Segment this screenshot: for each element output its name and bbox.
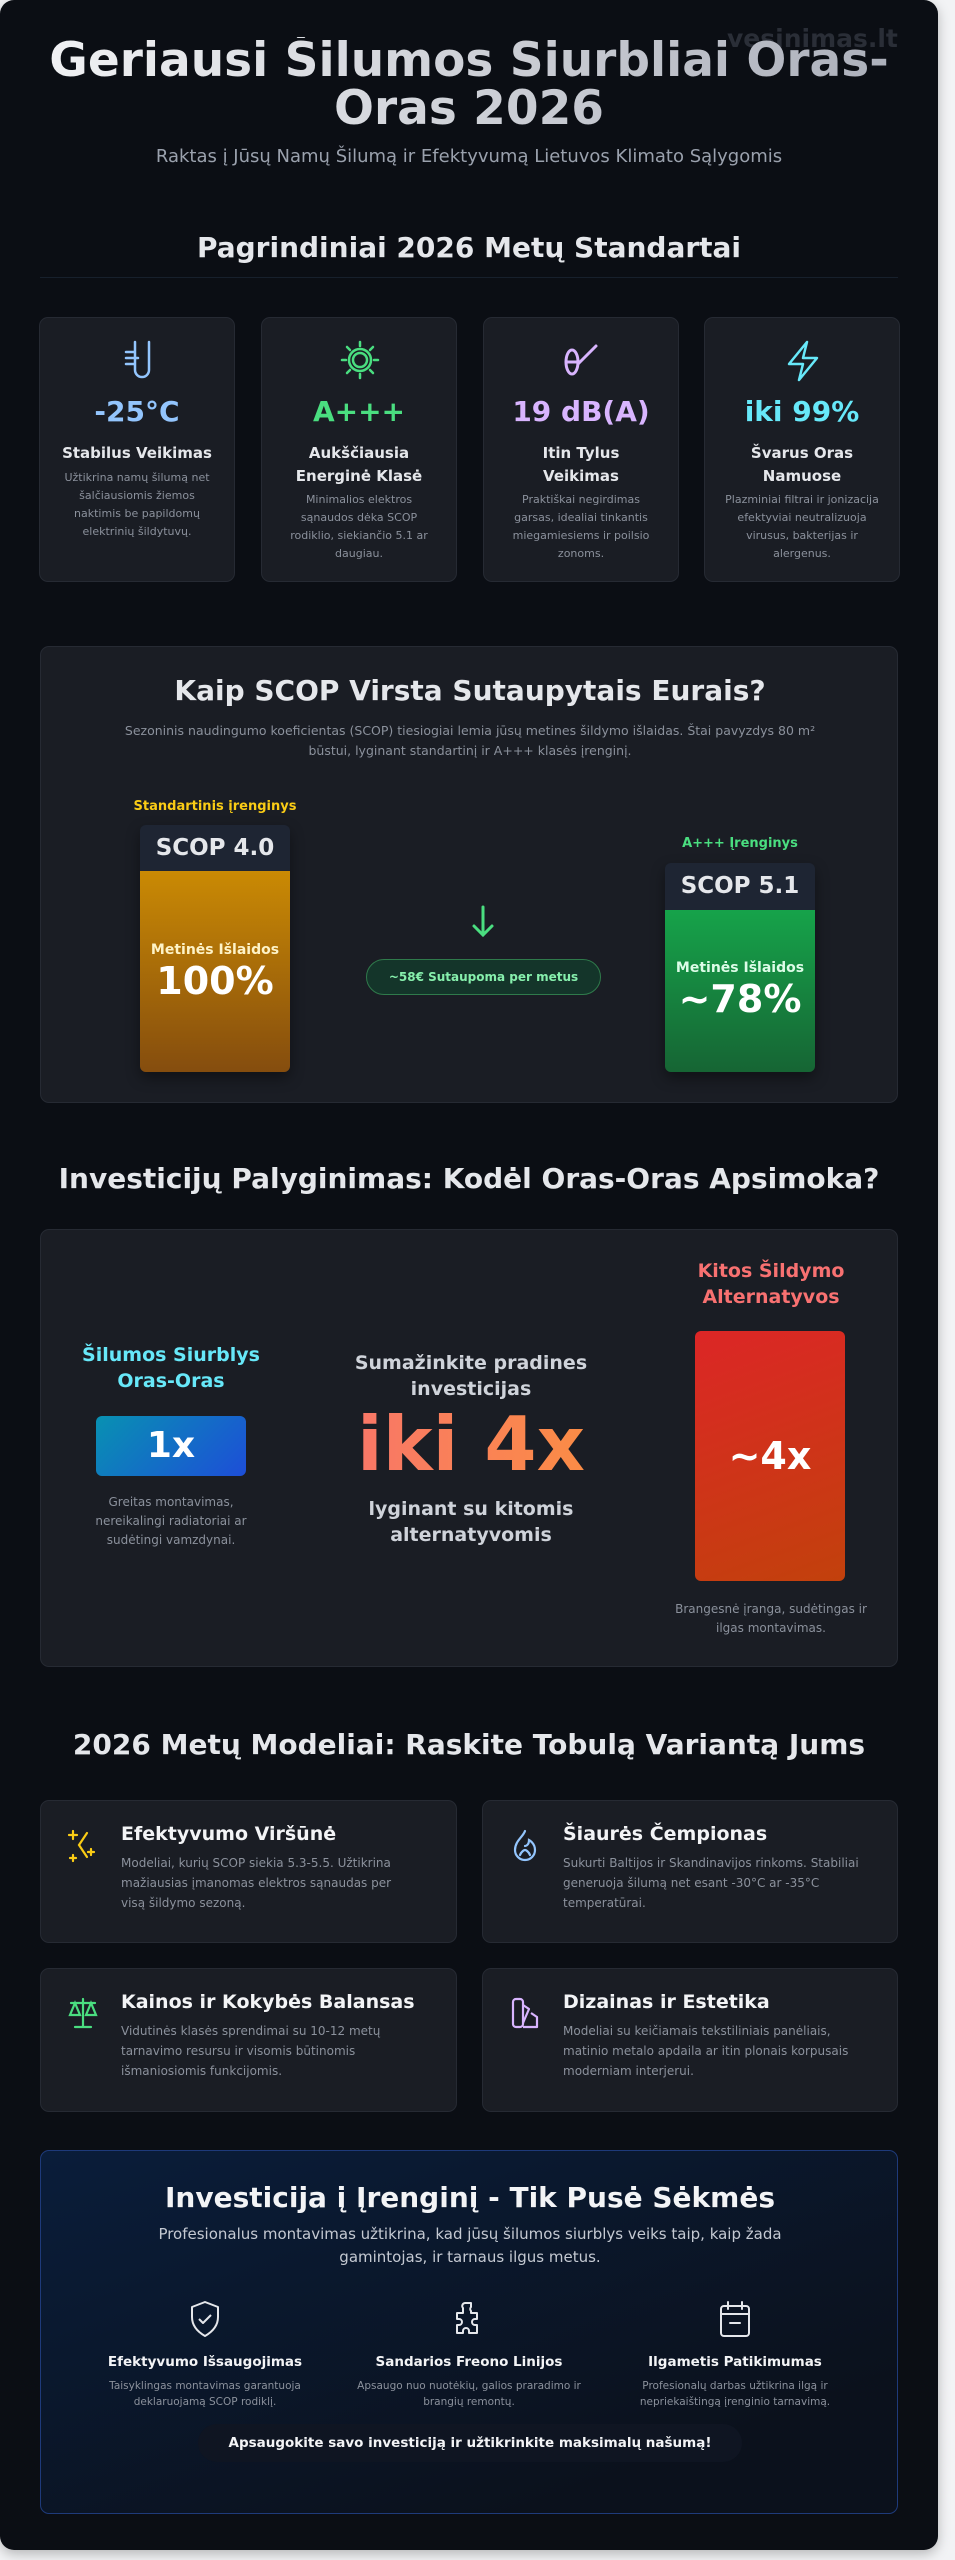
icon: sun: [340, 340, 380, 380]
bar: A+++ device: A+++ Įrenginys: [682, 836, 798, 851]
icon: swatches: [512, 1998, 538, 2028]
column: heat pump: Šilumos Siurblys: [82, 1344, 260, 1366]
bar: A+++ device: Metinės Išlaidos: [676, 960, 804, 976]
feature: refrigerant lines: Apsaugo nuo nuotėkių, galios praradimo ir brangių remontų.: [357, 2380, 581, 2408]
card: efficiency peak: Modeliai, kurių SCOP siekia 5.3-5.5. Užtikrina mažiausias įmanomas elektros sąnaudas per visą šildymo sezoną.: [121, 1856, 391, 1910]
icon: sparkles: [68, 1830, 96, 1862]
card: temperature: -25°C: [94, 395, 180, 428]
feature: efficiency: Efektyvumo Išsaugojimas: [108, 2354, 302, 2370]
bar: standard device: [134, 799, 296, 1077]
heading: SCOP: Kaip SCOP Virsta Sutaupytais Eurais?: [174, 674, 766, 707]
heading: investment: Investicijų Palyginimas: Kodėl Oras-Oras Apsimoka?: [59, 1162, 879, 1195]
panel: SCOP savings: [40, 646, 898, 1103]
card: clean air: [704, 317, 900, 582]
card: design: Dizainas ir Estetika: [563, 1991, 770, 2013]
card: energy class: Energinė Klasė: [296, 467, 422, 485]
heading: models: 2026 Metų Modeliai: Raskite Tobulą Variantą Jums: [73, 1728, 865, 1761]
column: center message: lyginant su kitomis alternatyvomis: [369, 1498, 573, 1546]
icon: calendar: [720, 2301, 750, 2337]
card: silence: Itin Tylus: [543, 444, 619, 462]
column: alternatives: Brangesnė įranga, sudėtingas ir ilgas montavimas.: [675, 1602, 867, 1635]
icon: lightning: [788, 340, 818, 382]
bar: A+++ device: SCOP 5.1: [681, 873, 799, 899]
card: silence: Veikimas: [543, 467, 619, 485]
card: northern champion: Sukurti Baltijos ir Skandinavijos rinkoms. Stabiliai generuoja šilumą net esant -30°C ar -35°C temperatūrai.: [563, 1856, 859, 1910]
heading: standards: Pagrindiniai 2026 Metų Standartai: [197, 231, 741, 264]
column: center message: Sumažinkite pradines investicijas: [355, 1352, 587, 1400]
bar: standard device: 100%: [156, 959, 274, 1003]
column: heat pump: Oras-Oras: [117, 1370, 225, 1392]
card: northern champion: [482, 1800, 898, 1943]
feature: refrigerant lines: [357, 2302, 581, 2408]
card: clean air: Namuose: [763, 467, 841, 485]
icon: flame drop: [514, 1830, 536, 1862]
column: heat pump: Greitas montavimas, nereikalingi radiatoriai ar sudėtingi vamzdynai.: [95, 1495, 247, 1547]
card: northern champion: Šiaurės Čempionas: [563, 1823, 767, 1845]
icon: ear: [564, 344, 598, 376]
text: CTA subtitle: Profesionalus montavimas užtikrina, kad jūsų šilumos siurblys veiks taip, kaip žada gamintojas, ir tarnaus ilgus metus.: [158, 2225, 782, 2266]
card: price quality: Vidutinės klasės sprendimai su 10-12 metų tarnavimo resursu ir visomis būtinomis išmaniosiomis funkcijomis.: [121, 2024, 380, 2078]
card: design: [482, 1968, 898, 2112]
card: silence: [483, 317, 679, 582]
icon: shield: [191, 2301, 219, 2337]
box: 1x: [96, 1416, 246, 1476]
column: alternatives: Alternatyvos: [702, 1286, 840, 1308]
feature: reliability: Profesionalų darbas užtikrina ilgą ir nepriekaištingą įrenginio tarnavimą.: [640, 2380, 830, 2408]
text: SCOP description: Sezoninis naudingumo koeficientas (SCOP) tiesiogiai lemia jūsų metines šildymo išlaidas. Štai pavyzdys 80 m² būstui, lyginant standartinį ir A+++ klasės įrenginį.: [125, 723, 815, 758]
bar: standard device: SCOP 4.0: [156, 835, 274, 861]
column: center message: iki 4x: [357, 1400, 585, 1488]
feature: efficiency: Taisyklingas montavimas garantuoja deklaruojamą SCOP rodiklį.: [109, 2380, 301, 2408]
bar: A+++ device: [665, 836, 815, 1077]
panel: installation CTA: [40, 2150, 898, 2514]
feature: reliability: [640, 2301, 830, 2408]
card: energy class: A+++: [313, 395, 405, 428]
card: temperature: Užtikrina namų šilumą net šalčiausiomis žiemos naktimis be papildomų elektrinių šildytuvų.: [64, 471, 210, 538]
bar: standard device: Metinės Išlaidos: [151, 942, 279, 958]
watermark: vesinimas.lt: [727, 24, 898, 53]
card: temperature: [39, 317, 235, 582]
card: clean air: Švarus Oras: [751, 444, 853, 462]
card: energy class: Aukščiausia: [309, 444, 409, 462]
box: ~4x: [695, 1331, 845, 1581]
card: price quality: Kainos ir Kokybės Balansas: [121, 1991, 415, 2013]
panel: investment comparison: [40, 1229, 898, 1667]
feature: reliability: Ilgametis Patikimumas: [648, 2354, 822, 2370]
column: center message: [355, 1352, 587, 1546]
feature: refrigerant lines: Sandarios Freono Linijos: [376, 2354, 562, 2370]
subtitle: Raktas į Jūsų Namų Šilumą ir Efektyvumą Lietuvos Klimato Sąlygomis: [156, 146, 782, 167]
heading: CTA: Investicija į Įrenginį - Tik Pusė Sėkmės: [165, 2181, 775, 2214]
box: 1x: 1x: [147, 1425, 195, 1466]
icon: puzzle: [456, 2302, 478, 2334]
card: energy class: Minimalios elektros sąnaudos dėka SCOP rodiklio, siekiančio 5.1 ar daugiau.: [290, 493, 428, 560]
feature: efficiency: [108, 2301, 302, 2408]
callout: CTA pill: Apsaugokite savo investiciją ir užtikrinkite maksimalų našumą!: [228, 2435, 711, 2451]
callout: CTA pill: [198, 2424, 742, 2462]
title: Geriausi Šilumos Siurbliai Oras-Oras 2026: [49, 33, 889, 136]
card: efficiency peak: Efektyvumo Viršūnė: [121, 1823, 336, 1845]
card: clean air: Plazminiai filtrai ir jonizacija efektyviai neutralizuoja virusus, bakterijas ir alergenus.: [725, 493, 879, 560]
card: clean air: iki 99%: [745, 395, 859, 428]
icon: scales: [68, 1998, 98, 2028]
arrow: savings: [472, 906, 494, 937]
card: temperature: Stabilus Veikimas: [62, 444, 212, 462]
callout: savings pill: [366, 959, 601, 995]
bar: A+++ device: ~78%: [679, 977, 801, 1021]
box: ~4x: ~4x: [729, 1434, 811, 1478]
column: alternatives: [675, 1260, 867, 1635]
column: alternatives: Kitos Šildymo: [698, 1260, 844, 1282]
card: silence: 19 dB(A): [512, 395, 650, 428]
card: design: Modeliai su keičiamais tekstiliniais panėliais, matinio metalo apdaila ar itin plonais korpusais moderniam interjerui.: [563, 2024, 848, 2078]
card: price quality: [40, 1968, 457, 2112]
card: silence: Praktiškai negirdimas garsas, idealiai tinkantis miegamiesiems ir poilsio zonoms.: [513, 493, 649, 560]
model cards: [40, 1800, 898, 2112]
column: heat pump: [82, 1344, 260, 1547]
standard cards: [39, 317, 900, 582]
callout: savings pill: ~58€ Sutaupoma per metus: [389, 970, 578, 984]
card: energy class: [261, 317, 457, 582]
icon: thermometer: [124, 340, 150, 378]
card: efficiency peak: [40, 1800, 457, 1943]
bar: standard device: Standartinis įrenginys: [134, 799, 296, 814]
